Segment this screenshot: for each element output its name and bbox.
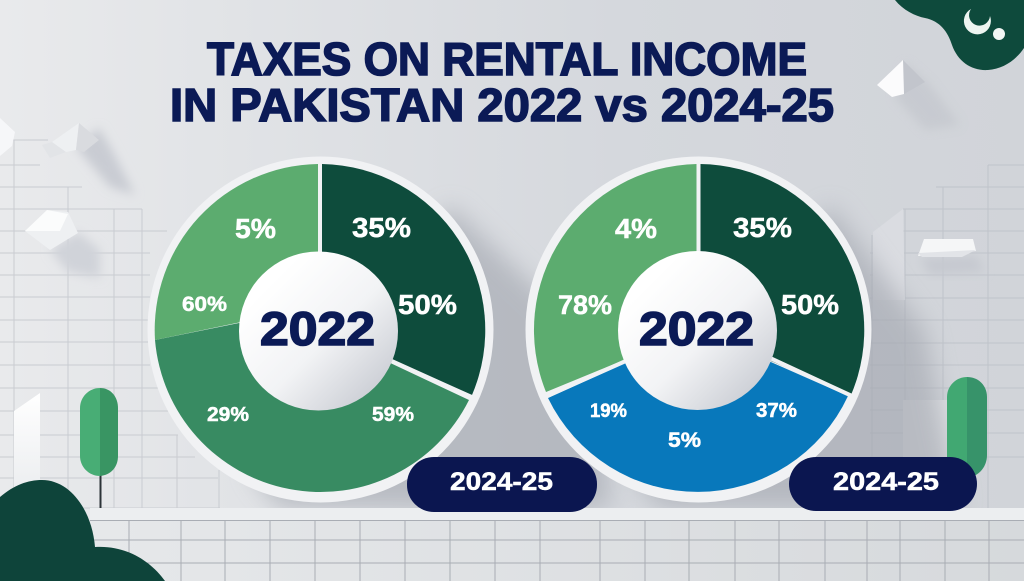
label 35%: 35% (733, 212, 792, 243)
label 60%: 60% (182, 293, 227, 316)
plant: right (947, 377, 987, 478)
segment: mid green (155, 323, 469, 492)
label 50%: 50% (781, 289, 839, 320)
icon: moon dot (993, 28, 1005, 40)
right wall grid (870, 165, 1024, 508)
decorative shelf block: right (918, 239, 985, 275)
label 29%: 29% (207, 404, 249, 426)
title (170, 33, 834, 131)
donut outer ring (148, 156, 494, 502)
title: IN PAKISTAN 2022 vs 2024-25 (170, 79, 834, 131)
label 59%: 59% (372, 404, 414, 426)
pill: right 2024-25: 2024-25 (833, 468, 939, 496)
title: TAXES ON RENTAL INCOME (207, 33, 807, 85)
center year: 2022 (260, 302, 375, 355)
panel: right donut (526, 156, 872, 502)
center hub (239, 252, 398, 410)
center year: 2022 (639, 302, 754, 355)
label 50%: 50% (398, 289, 457, 320)
decorative cube: middle left (25, 210, 100, 278)
translucent house panel: right (873, 209, 905, 300)
label 19%: 19% (590, 401, 627, 422)
decorative cube: top left corner (0, 118, 15, 156)
pill: right 2024-25 (789, 457, 977, 511)
ledge and bottom tiles (90, 508, 1024, 581)
plant: left (80, 388, 118, 508)
white vertical panel: left (14, 393, 40, 490)
center hub (618, 251, 777, 410)
segment: light green (534, 164, 697, 392)
segment: dark green (320, 164, 485, 395)
blob: top right with moon (895, 0, 1024, 70)
divider lines (320, 160, 476, 399)
decorative cube: upper right (877, 60, 960, 130)
donut shadows (250, 205, 960, 508)
pill: left 2024-25 (407, 457, 597, 512)
left wall grid (0, 140, 220, 508)
label 5%: 5% (235, 213, 276, 244)
segment: blue (548, 330, 848, 492)
label 78%: 78% (558, 290, 612, 320)
label 5%: 5% (668, 429, 701, 452)
blob: bottom left (0, 480, 165, 581)
donut outer ring (526, 156, 872, 502)
label 35%: 35% (352, 212, 411, 243)
decorative cube: upper left (42, 123, 135, 195)
segment: dark green (698, 164, 864, 395)
label 37%: 37% (756, 400, 797, 422)
divider lines (545, 160, 852, 397)
segment: light green (155, 164, 318, 340)
pill: left 2024-25: 2024-25 (450, 468, 553, 496)
label 4%: 4% (615, 213, 657, 244)
icon: crescent moon (964, 9, 991, 34)
panel: left donut (148, 156, 494, 502)
pale box: right (903, 400, 947, 458)
